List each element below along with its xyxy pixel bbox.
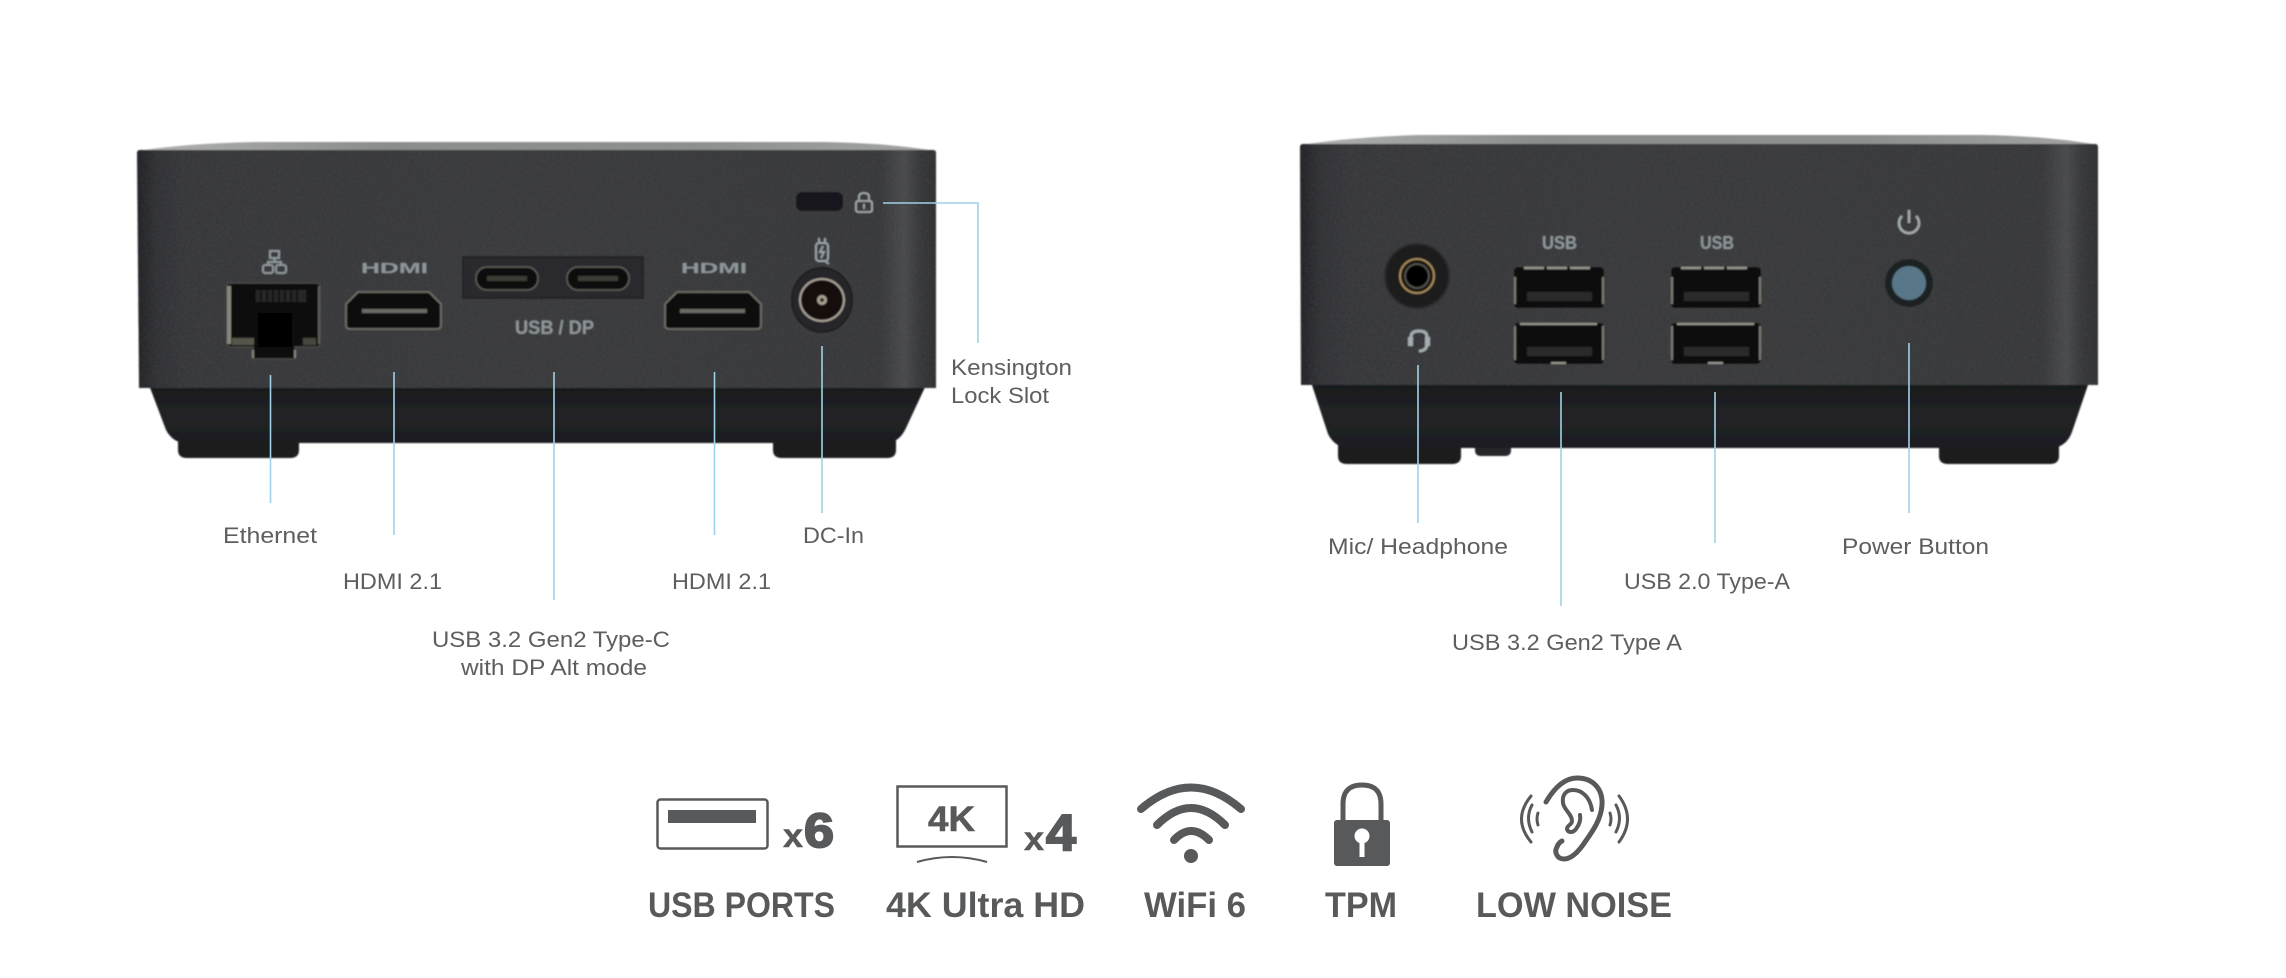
label: USB / DP silkscreen: USB / DP <box>515 318 594 339</box>
label: HDMI silkscreen left: HDMI <box>361 260 428 277</box>
Kensington slot <box>796 192 843 211</box>
icon: 4K monitor <box>898 786 1006 862</box>
rear device body <box>1300 144 2098 385</box>
label: USB silkscreen left: USB <box>1542 233 1577 253</box>
USB-C panel <box>463 257 643 298</box>
device lower base <box>149 385 926 443</box>
device top edge <box>137 142 936 151</box>
USB-A port <box>1514 267 1604 308</box>
label: Power Button: Power Button <box>1842 534 1989 559</box>
panel: rear of device <box>1300 135 2098 464</box>
icon: lock <box>856 193 872 212</box>
label: USB silkscreen right: USB <box>1700 233 1734 253</box>
label: HDMI silkscreen right: HDMI <box>681 260 747 277</box>
USB-A port <box>1514 323 1604 364</box>
icon: USB port <box>658 800 768 848</box>
count x4 <box>1024 804 1077 861</box>
icon: ear with sound waves <box>1522 778 1628 859</box>
label: Ethernet: Ethernet <box>223 523 317 548</box>
USB-C port 1 <box>476 267 538 290</box>
USB-A ports left stack <box>1514 267 1604 364</box>
icon: power <box>1899 210 1919 233</box>
label: Kensington Lock Slot <box>951 355 1072 408</box>
label: 4K Ultra HD: 4K Ultra HD <box>886 886 1085 925</box>
label: TPM: TPM <box>1325 886 1397 925</box>
feature: low noise <box>1476 778 1672 925</box>
device body <box>137 150 936 388</box>
label: USB 3.2 Gen2 Type A: USB 3.2 Gen2 Type A <box>1452 630 1682 655</box>
label: HDMI 2.1 right: HDMI 2.1 <box>672 569 771 594</box>
feature: TPM <box>1325 785 1397 925</box>
count x6: x <box>783 817 804 854</box>
feature: USB ports <box>648 800 835 925</box>
leader lines: front <box>270 203 978 600</box>
label: LOW NOISE: LOW NOISE <box>1476 886 1672 925</box>
USB-C port 2 <box>567 267 629 290</box>
rear device top edge <box>1300 135 2098 145</box>
feature: WiFi 6 <box>1141 788 1246 925</box>
label: USB PORTS: USB PORTS <box>648 886 835 925</box>
USB-A port <box>1671 323 1761 364</box>
count x4: x <box>1024 820 1045 857</box>
label: HDMI 2.1 left: HDMI 2.1 <box>343 569 442 594</box>
count x6: 6 <box>804 805 834 858</box>
USB-A port <box>1671 267 1761 308</box>
icon: headset <box>1408 331 1430 351</box>
device feet <box>178 436 896 458</box>
HDMI port right <box>665 292 761 329</box>
count x4: 4 <box>1046 804 1077 861</box>
label: USB 3.2 Gen2 Type-C: USB 3.2 Gen2 Type-C <box>432 627 670 652</box>
power button <box>1885 259 1933 307</box>
USB-A ports right stack <box>1671 267 1761 364</box>
label: Mic/Headphone: Mic/ Headphone <box>1328 534 1508 559</box>
label: Kensington Lock Slot: Kensington <box>951 355 1072 380</box>
icon: network <box>263 251 286 273</box>
icon: WiFi <box>1141 788 1241 863</box>
icon: padlock <box>1334 785 1390 866</box>
label: Kensington Lock Slot: Lock Slot <box>951 383 1049 408</box>
audio jack <box>1385 244 1449 308</box>
DC-in jack <box>792 268 852 332</box>
feature: 4K Ultra HD <box>886 786 1085 925</box>
label: DC-In: DC-In <box>803 523 864 548</box>
front port labels <box>223 355 1072 680</box>
rear device lower base <box>1311 382 2089 448</box>
label: USB 3.2 Gen2 Type-C <box>432 627 670 680</box>
Ethernet port <box>227 283 320 359</box>
icon: 4K monitor: 4K <box>928 800 975 839</box>
HDMI port left <box>346 292 441 329</box>
icon: DC power <box>816 238 829 264</box>
panel: front of device <box>137 142 936 458</box>
rear port labels <box>1328 534 1989 655</box>
label: USB 2.0 Type-A: USB 2.0 Type-A <box>1624 569 1790 594</box>
leader lines: rear <box>1418 343 1909 606</box>
rear device feet <box>1338 440 2059 464</box>
label: USB 3.2 Gen2 Type-C: with DP Alt mode <box>460 655 647 680</box>
label: WiFi 6: WiFi 6 <box>1144 886 1246 925</box>
count x6 <box>783 805 834 858</box>
